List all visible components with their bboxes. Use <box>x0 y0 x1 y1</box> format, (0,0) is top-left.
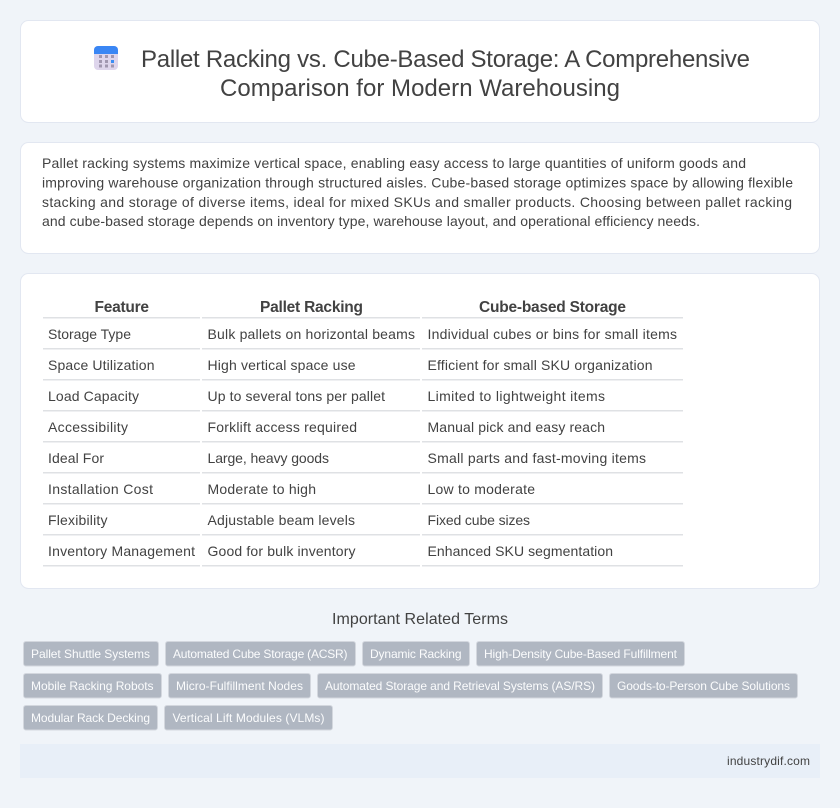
tag <box>610 674 798 698</box>
table row: installation cost: Installation Cost <box>48 481 153 497</box>
tag: Mobile Racking Robots <box>31 679 154 693</box>
table header row: Feature <box>94 299 149 316</box>
table row: inventory management: Good for bulk inventory <box>208 543 356 559</box>
tag: High-Density Cube-Based Fulfillment <box>484 647 678 661</box>
table header row: Cube-based Storage <box>479 299 626 316</box>
text block: introduction paragraph: stacking and storage of diverse items, ideal for mixed SKUs and smaller products. Choosing between pallet racking <box>42 194 792 210</box>
table row: load capacity: Up to several tons per pallet <box>208 388 385 404</box>
table row: storage type: Storage Type <box>48 326 131 342</box>
table header row <box>43 299 683 318</box>
table row: flexibility: Fixed cube sizes <box>428 512 530 528</box>
icon: storage grid calendar <box>94 46 118 70</box>
tag: Automated Cube Storage (ACSR) <box>173 647 348 661</box>
table row: inventory management <box>43 543 683 566</box>
table row: storage type: Bulk pallets on horizontal beams <box>208 326 415 342</box>
table row: accessibility: Accessibility <box>48 419 128 435</box>
table row: ideal for <box>43 450 683 474</box>
table row: space utilization: Space Utilization <box>48 357 154 373</box>
table header row: Pallet Racking <box>260 299 363 316</box>
table row: storage type: Individual cubes or bins for small items <box>428 326 677 342</box>
tag <box>164 706 332 730</box>
text block: introduction paragraph: Pallet racking systems maximize vertical space, enabling easy access to large quantities of uniform goods and <box>42 155 746 171</box>
tag: Modular Rack Decking <box>31 711 150 725</box>
footer: industrydif.com <box>727 754 810 768</box>
text block: introduction paragraph: and cube-based storage depends on inventory type, warehouse layout, and operational efficiency needs. <box>42 213 700 229</box>
table row: load capacity <box>43 388 683 412</box>
text block: introduction paragraph: improving warehouse organization through structured aisles. Cube-based storage optimizes space by allowing flexible <box>42 174 793 190</box>
tag: Dynamic Racking <box>370 647 462 661</box>
table row: flexibility: Flexibility <box>48 512 108 528</box>
table row: installation cost: Low to moderate <box>428 481 535 497</box>
tag <box>318 674 602 698</box>
panel: header <box>20 20 820 122</box>
tag: Automated Storage and Retrieval Systems (AS/RS) <box>325 679 595 693</box>
tag: Goods-to-Person Cube Solutions <box>617 679 790 693</box>
tag <box>476 642 684 666</box>
table row: storage type <box>43 326 683 350</box>
table row: space utilization: High vertical space use <box>208 357 356 373</box>
table row: accessibility <box>43 419 683 442</box>
table row: ideal for: Ideal For <box>48 450 104 466</box>
tag: Micro-Fulfillment Nodes <box>176 679 303 693</box>
table row: load capacity: Load Capacity <box>48 388 139 404</box>
panel: introduction <box>20 142 820 254</box>
table row: accessibility: Forklift access required <box>208 419 357 435</box>
tag: Vertical Lift Modules (VLMs) <box>172 711 324 725</box>
table row: flexibility: Adjustable beam levels <box>208 512 355 528</box>
heading: important related terms: Important Related Terms <box>332 611 508 628</box>
table row: space utilization: Efficient for small SKU organization <box>428 357 652 373</box>
table row: ideal for: Large, heavy goods <box>208 450 329 466</box>
table row: accessibility: Manual pick and easy reach <box>428 419 605 435</box>
related terms tags <box>24 642 798 730</box>
footer <box>20 744 820 778</box>
table row: installation cost <box>43 481 683 504</box>
title: Comparison for Modern Warehousing <box>220 75 620 102</box>
table row: flexibility <box>43 512 683 536</box>
table row: inventory management: Enhanced SKU segmentation <box>428 543 613 559</box>
tag <box>168 674 310 698</box>
table row: space utilization <box>43 357 683 380</box>
table row: inventory management: Inventory Management <box>48 543 195 559</box>
title <box>141 46 750 102</box>
table row: installation cost: Moderate to high <box>208 481 316 497</box>
title: Pallet Racking vs. Cube-Based Storage: A Comprehensive <box>141 46 750 73</box>
panel: comparison table <box>20 274 820 588</box>
tag <box>24 706 158 730</box>
tag <box>24 642 158 666</box>
tag: Pallet Shuttle Systems <box>31 647 150 661</box>
tag <box>362 642 470 666</box>
tag <box>24 674 162 698</box>
table row: load capacity: Limited to lightweight items <box>428 388 605 404</box>
tag <box>166 642 356 666</box>
table row: ideal for: Small parts and fast-moving items <box>428 450 646 466</box>
text block: introduction paragraph <box>42 155 793 229</box>
